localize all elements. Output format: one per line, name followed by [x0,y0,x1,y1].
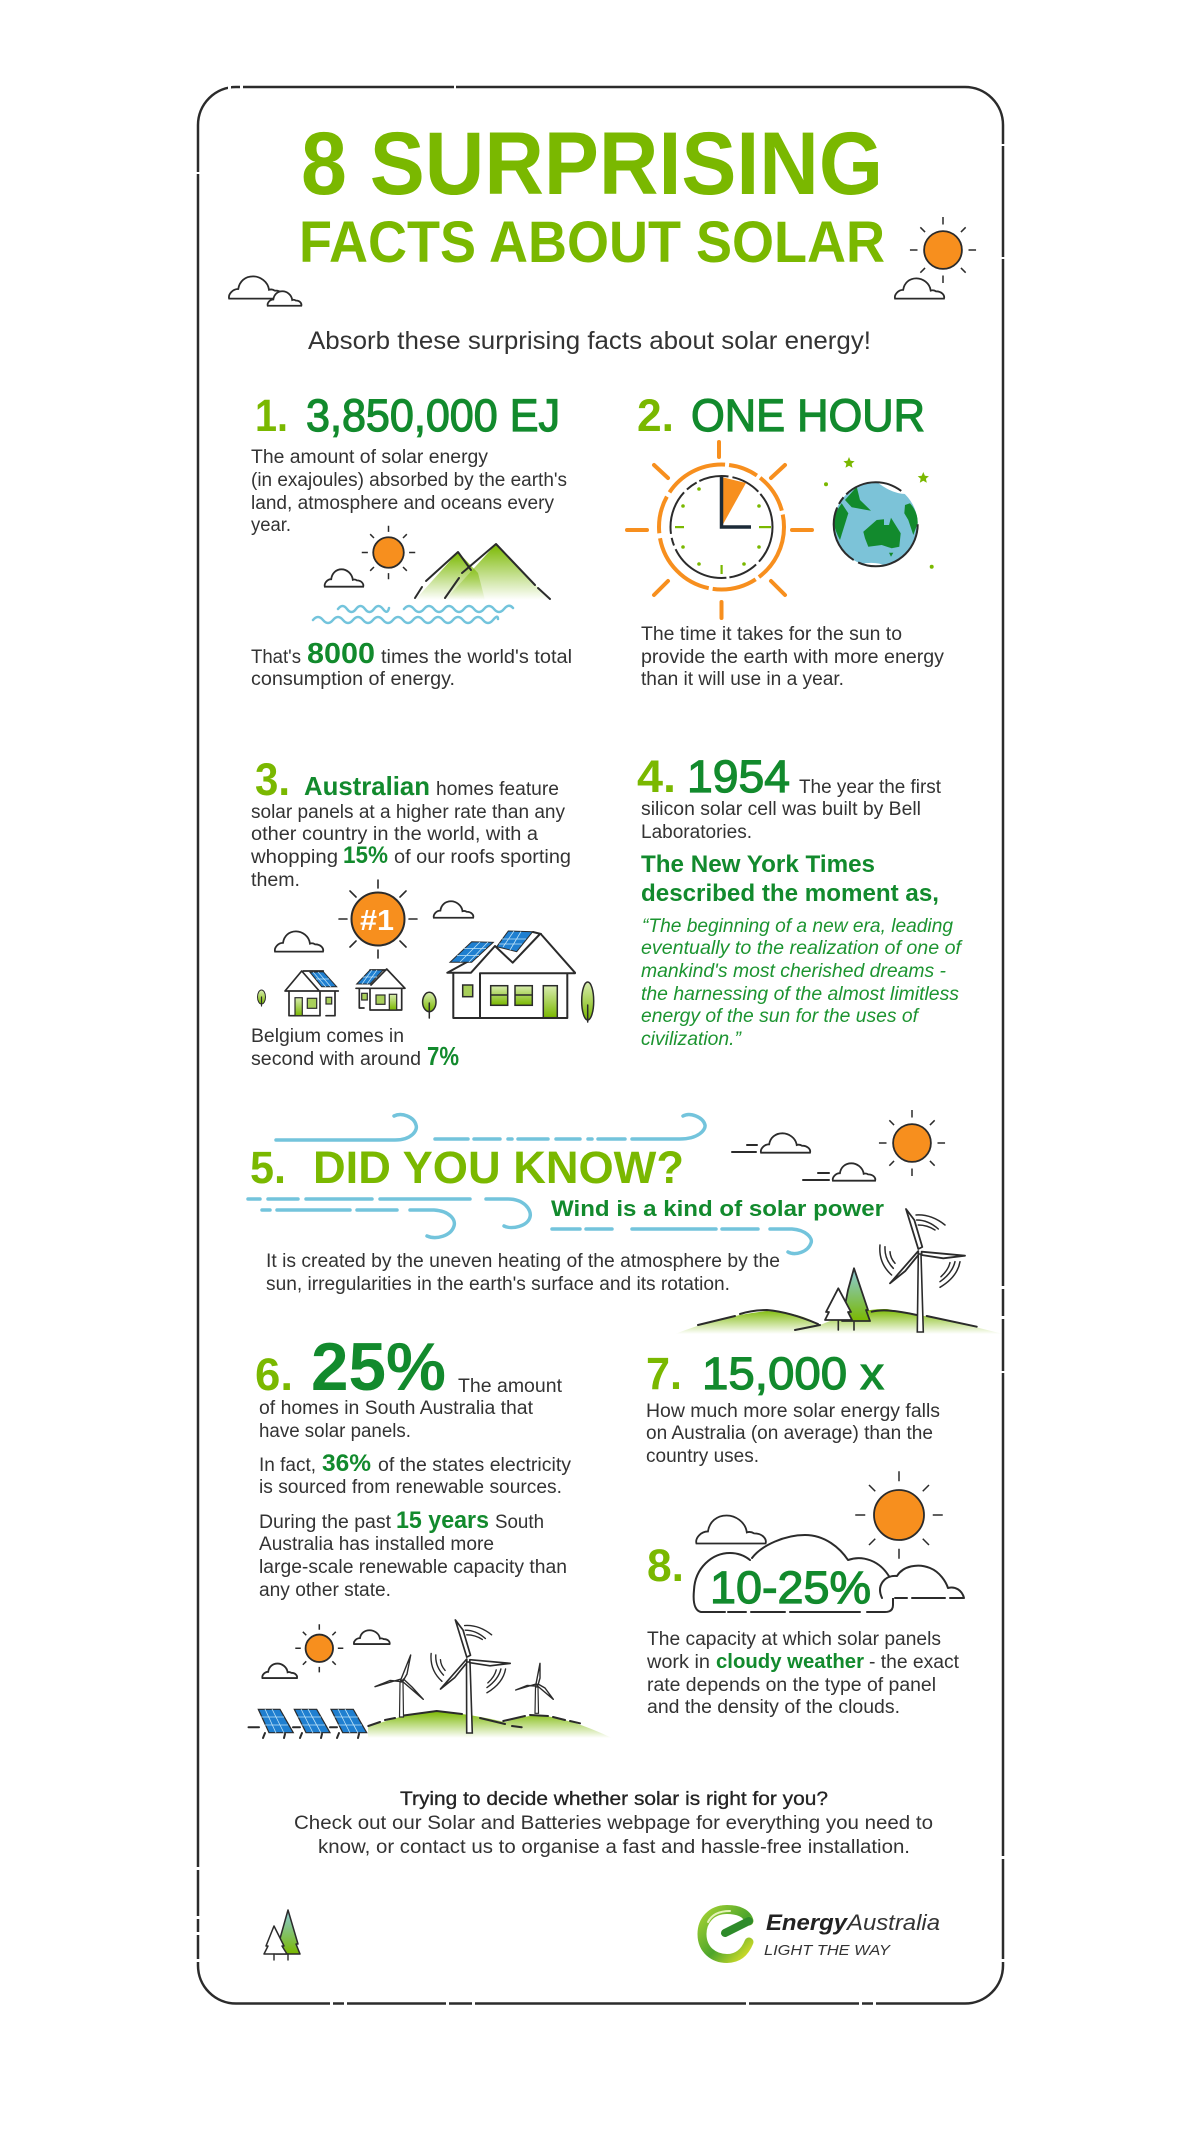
fact 1 comparison [251,638,572,690]
fact 5 heading: 5. [250,1142,286,1193]
fact 4 intro: silicon solar cell was built by Bell [641,799,921,820]
fact 3 Belgium note: Belgium comes in [251,1026,404,1047]
fact 6 text: of homes in South Australia that [259,1398,534,1419]
fact 3 text: whopping [250,847,338,868]
subtitle: Absorb these surprising facts about solar energy! [308,327,871,355]
fact 6 text: any other state. [259,1580,391,1601]
fact 6 text: The amount [458,1376,563,1397]
fact 4 quote: mankind's most cherished dreams - [641,961,946,982]
fact 3 text: 15% [343,842,388,869]
panel: fact 3 [250,754,594,1071]
panel: fact 1 [251,390,572,690]
closing call to action: Trying to decide whether solar is right for you? [400,1789,828,1810]
icon: header sun and cloud right [895,217,976,299]
fact 2 description: provide the earth with more energy [641,647,945,668]
fact 1 description: year. [251,515,291,536]
title [299,113,885,275]
fact 4 intro: 1954 [687,751,790,802]
title: 8 SURPRISING [301,113,883,213]
fact 4 quote: “The beginning of a new era, leading [642,916,953,937]
icon: big house with solar panels [447,931,575,1018]
fact 7 description: country uses. [646,1446,759,1467]
fact 3 text: of our roofs sporting [394,847,571,868]
fact 3 Belgium note [251,1026,459,1071]
fact 4 intro [637,751,942,843]
logo wordmark: Australia [845,1910,940,1935]
fact 7 description [646,1401,940,1467]
fact 6 text [255,1329,572,1601]
logo wordmark [764,1910,940,1959]
fact 5 heading: DID YOU KNOW? [313,1142,684,1193]
fact 6 text: During the past [259,1512,392,1533]
fact 4 subheading: described the moment as, [641,880,939,907]
panel: fact 5 [248,1110,1003,1334]
fact 3 text [250,754,571,891]
fact 6 text: South [495,1512,544,1533]
fact 4 intro: The year the first [799,777,942,798]
fact 3 Belgium note: 7% [427,1041,459,1071]
fact 3 Belgium note: second with around [251,1049,421,1070]
closing call to action: Check out our Solar and Batteries webpage for everything you need to [294,1813,933,1834]
fact 6 text: 36% [322,1450,371,1477]
fact 2 heading: 2. [637,390,674,441]
panel: fact 4 [637,751,963,1050]
icon: sun and clouds [694,1471,964,1612]
fact 8 description: work in [646,1652,710,1673]
rounded frame [195,84,1006,2007]
fact 4 quote: civilization.” [641,1029,743,1050]
fact 8 description: cloudy weather [716,1651,864,1673]
fact 4 subheading: The New York Times [641,851,875,878]
logo: EnergyAustralia [702,1910,940,1959]
fact 4 quote: the harnessing of the almost limitless [641,984,959,1005]
fact 5 description [266,1251,780,1295]
icon: clock sun [627,442,812,618]
panel: fact 6 [248,1329,612,1738]
fact 2 heading: ONE HOUR [691,390,925,441]
fact 7 heading: 15,000 x [702,1348,885,1399]
fact 6 text: large-scale renewable capacity than [259,1557,567,1578]
icon: hills, trees and wind turbine [675,1209,1003,1334]
fact 5 subheading: Wind is a kind of solar power [551,1196,884,1221]
fact 6 text: have solar panels. [259,1421,411,1442]
fact 4 quote: eventually to the realization of one of [641,938,963,959]
panel: fact 2 [627,390,945,690]
fact 6 text: of the states electricity [378,1455,572,1476]
icon: small house left [285,971,338,1016]
fact 1 description [251,447,567,536]
fact 3 text: other country in the world, with a [251,824,538,845]
icon: sun and clouds [262,1624,390,1678]
fact 3 text: solar panels at a higher rate than any [251,802,565,823]
fact 1 description: The amount of solar energy [251,447,489,468]
fact 8 number [647,1540,871,1613]
icon: trees [258,982,594,1022]
title: FACTS ABOUT SOLAR [299,210,885,275]
fact 2 description [641,624,945,690]
panel: fact 8 [646,1471,964,1718]
fact 6 text: 25% [311,1329,446,1405]
fact 8 description: The capacity at which solar panels [647,1629,941,1650]
fact 4 quote [641,916,963,1050]
icon: solar panels [248,1709,367,1738]
fact 1 comparison: 8000 [307,638,375,670]
fact 8 description: and the density of the clouds. [647,1697,900,1718]
fact 4 intro: 4. [637,751,676,802]
fact 3 text: them. [251,870,300,891]
fact 8 description: - the exact [869,1652,960,1673]
icon: sun and drifting clouds [732,1110,945,1181]
fact 4 intro: Laboratories. [641,822,752,843]
fact 8 number: 10-25% [710,1562,871,1613]
fact 7 description: on Australia (on average) than the [646,1423,933,1444]
icon: number one sun: #1 [360,905,394,937]
fact 1 description: land, atmosphere and oceans every [251,493,554,514]
fact 2 description: than it will use in a year. [641,669,844,690]
fact 6 text: 6. [255,1349,293,1400]
icon: hills and wind turbines [368,1620,612,1738]
fact 6 text: is sourced from renewable sources. [259,1477,562,1498]
logo wordmark: Energy [766,1910,849,1935]
icon: sun, mountains and water [313,526,550,623]
fact 1 comparison: consumption of energy. [251,669,455,690]
fact 4 subheading [641,851,939,907]
fact 3 text: 3. [255,754,290,805]
icon: clouds [275,901,473,952]
fact 7 heading: 7. [646,1348,682,1399]
icon: e mark [702,1910,749,1958]
fact 7 description: How much more solar energy falls [646,1401,940,1422]
icon: footer trees [264,1910,300,1960]
fact 1 heading: 1. [255,390,288,441]
fact 4 quote: energy of the sun for the uses of [641,1006,920,1027]
fact 6 text: Australia has installed more [259,1534,494,1555]
fact 2 description: The time it takes for the sun to [641,624,902,645]
fact 3 text: Australian [304,771,430,801]
fact 3 text: homes feature [436,779,559,800]
fact 1 heading: 3,850,000 EJ [306,390,560,441]
icon: small house right [356,969,405,1010]
icon: wind lines [248,1115,811,1254]
fact 8 number: 8. [647,1540,684,1591]
fact 1 comparison: That's [251,647,301,668]
panel: fact 7 [646,1348,940,1467]
fact 6 text: In fact, [259,1455,316,1476]
closing call to action [294,1789,933,1858]
fact 1 comparison: times the world's total [381,647,572,668]
fact 8 description [646,1629,960,1718]
icon: number one sun [339,880,417,958]
closing call to action: know, or contact us to organise a fast and hassle-free installation. [318,1837,910,1858]
fact 5 description: sun, irregularities in the earth's surface and its rotation. [266,1274,730,1295]
fact 6 text: 15 years [396,1507,489,1534]
logo wordmark: LIGHT THE WAY [764,1942,891,1959]
fact 1 description: (in exajoules) absorbed by the earth's [251,470,567,491]
fact 5 description: It is created by the uneven heating of the atmosphere by the [266,1251,780,1272]
icon: globe and stars [824,457,934,569]
fact 8 description: rate depends on the type of panel [647,1675,936,1696]
icon: header clouds left [229,276,301,306]
